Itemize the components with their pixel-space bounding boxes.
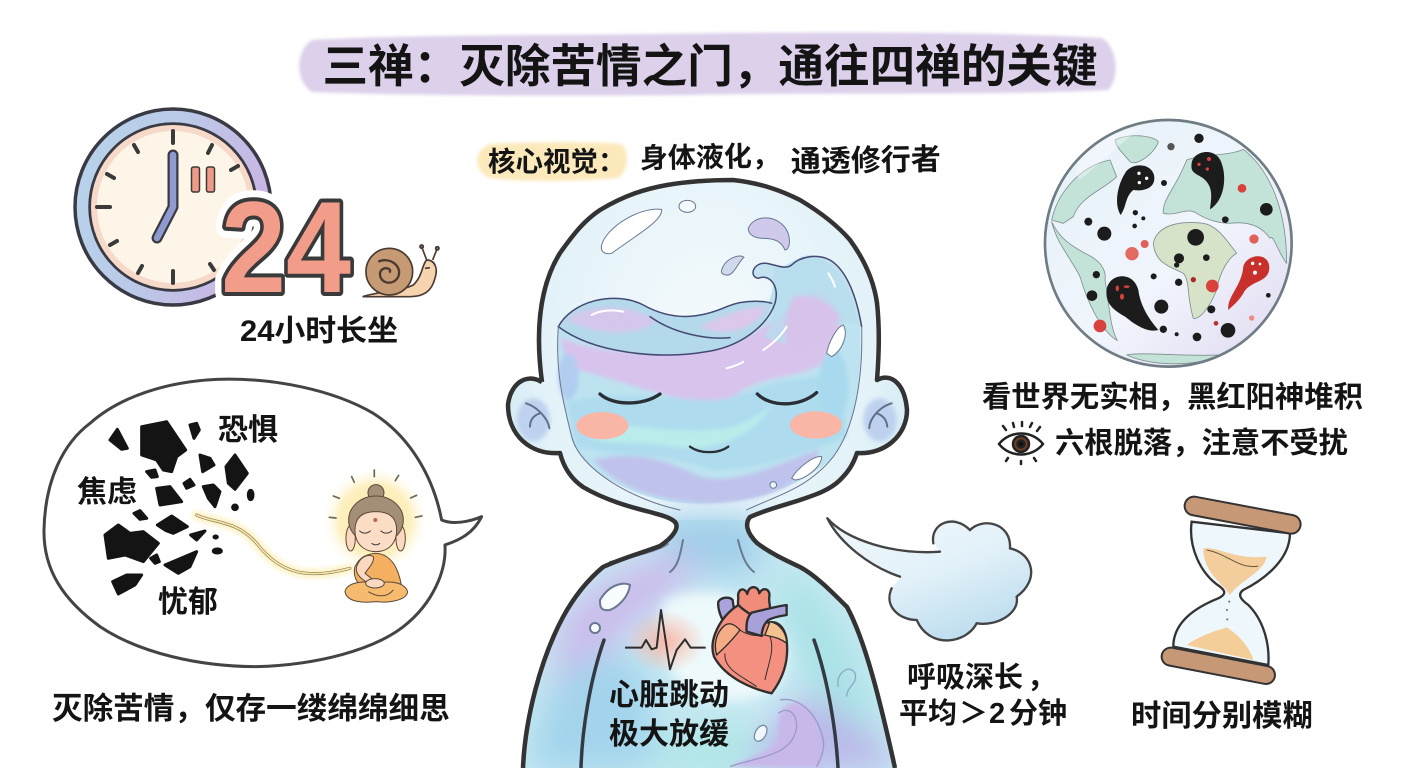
icon: heart: [713, 587, 787, 693]
title: 三禅：灭除苦情之门，通往四禅的关键: [322, 41, 1098, 92]
big number 24: 24: [221, 174, 351, 320]
body outline: [508, 180, 907, 768]
label: breathing line 2: ＞: [959, 698, 988, 730]
label: depression: 忧郁: [158, 586, 218, 619]
bubble outline: [44, 379, 482, 667]
outlines in head: [558, 256, 862, 510]
water surface: [560, 298, 772, 355]
black shards: [105, 422, 253, 594]
label: fear: 恐惧: [218, 414, 278, 447]
label: breathing line 1: 呼吸深长: [907, 661, 1023, 694]
label: time blur: 时间分别模糊: [1131, 699, 1313, 733]
head watercolour: [517, 200, 897, 510]
big number 24: 24: [221, 174, 351, 320]
caption: world: 看世界无实相，黑红阳神堆积: [982, 381, 1363, 414]
panel: speech bubble: [44, 379, 482, 667]
swirl on torso: [730, 669, 856, 767]
icon: hourglass: [1171, 506, 1291, 675]
clock icon: [75, 109, 271, 305]
label: slows down: 极大放缓: [609, 718, 729, 751]
highlight label: core visual: 核心视觉：: [488, 146, 626, 177]
torso watercolour: [523, 515, 895, 768]
cheeks: [576, 411, 842, 439]
caption: six roots: 六根脱落，注意不受扰: [1055, 427, 1348, 460]
label: breathing line 2: 分钟: [1009, 697, 1067, 730]
meditating figure: [320, 465, 430, 602]
label: breathing line 1: ，: [1027, 662, 1056, 694]
icon: snail: [363, 245, 439, 297]
icon: eye: [999, 422, 1043, 464]
icon: globe with ghosts: [1045, 120, 1292, 367]
icon: breath cloud: [827, 518, 1031, 640]
label: breathing line 2: 2: [989, 698, 1005, 730]
torso details: [581, 540, 838, 768]
ears: [517, 398, 897, 442]
label: heartbeat: 心脏跳动: [609, 679, 729, 712]
caption: bubble: 灭除苦情，仅存一缕绵绵细思: [52, 692, 450, 726]
subtitle: body liquefied: 身体液化，: [640, 141, 780, 174]
label: breathing line 2: 平均: [899, 697, 957, 730]
central figure: liquid body: [508, 180, 907, 768]
heart rate line: [625, 610, 706, 673]
subtitle: transparent practitioner: 通透修行者: [791, 143, 941, 179]
label: 24 hours: 24小时长坐: [240, 315, 398, 348]
highlights: [601, 200, 845, 488]
silhouette fill: [508, 180, 907, 768]
glowing thread: [197, 515, 350, 574]
cresting wave: [753, 256, 862, 345]
label: anxiety: 焦虑: [77, 476, 137, 509]
eyes and smile: [600, 393, 817, 452]
